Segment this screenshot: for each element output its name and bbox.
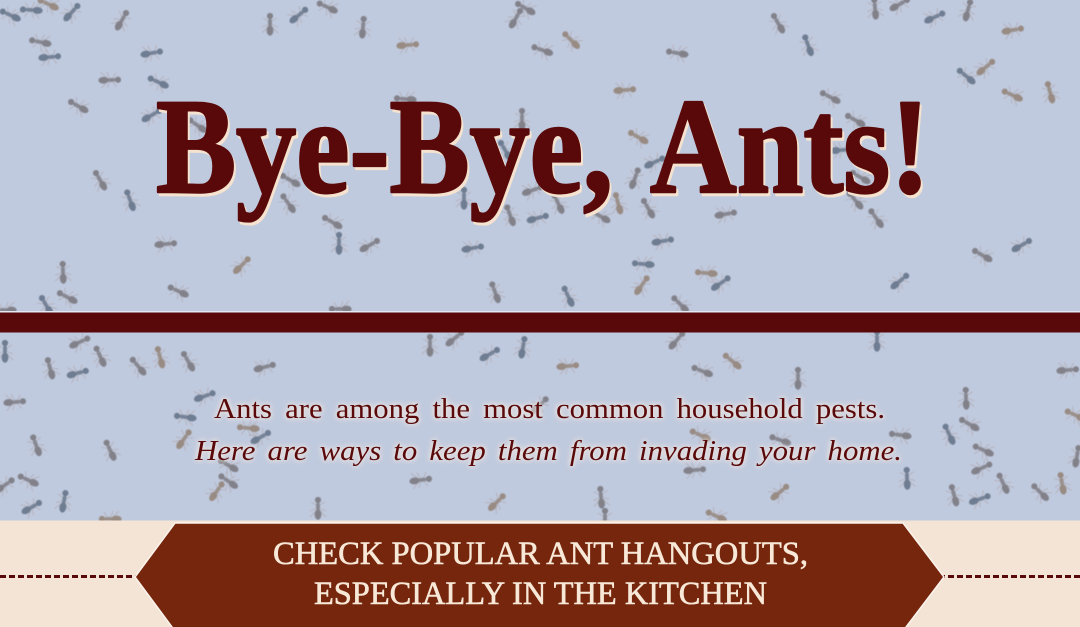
horizontal divider bar <box>0 311 1080 332</box>
intro text <box>194 394 902 467</box>
intro line 1: Ants are among the most common household pests. <box>214 394 885 425</box>
banner heading line 2: ESPECIALLY IN THE KITCHEN <box>314 576 767 612</box>
dashed connector left <box>0 575 140 578</box>
section banner <box>135 523 944 627</box>
banner heading line 1: CHECK POPULAR ANT HANGOUTS, <box>273 536 808 572</box>
intro line 2: Here are ways to keep them from invading your home. <box>194 436 902 467</box>
title: Bye-Bye, <box>156 72 613 222</box>
title <box>156 72 930 222</box>
bottom beige band <box>0 520 1080 627</box>
title: Ants! <box>650 72 930 222</box>
dashed connector right <box>940 575 1080 578</box>
